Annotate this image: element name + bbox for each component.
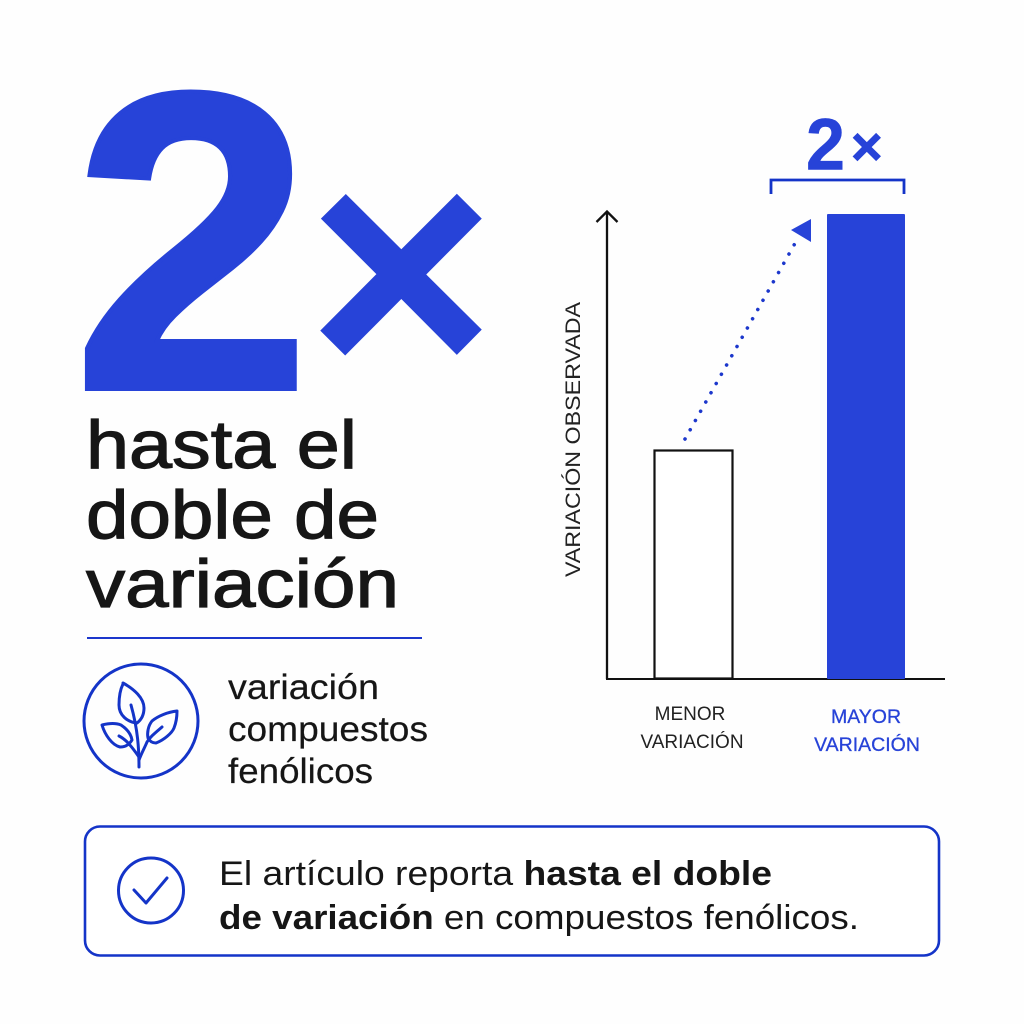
callout text xyxy=(219,855,859,937)
icon label: variación xyxy=(228,668,379,707)
callout box xyxy=(85,826,939,956)
big headline number 2x xyxy=(72,4,495,480)
callout text: de variación en compuestos fenólicos. xyxy=(219,899,859,937)
headline text: hasta el xyxy=(86,407,357,483)
headline text: doble de xyxy=(86,477,379,553)
headline text: variación xyxy=(86,546,399,622)
bar: mayor variacion xyxy=(827,214,905,679)
icon label xyxy=(228,668,428,791)
category label: menor xyxy=(640,704,744,753)
category label: mayor: MAYOR xyxy=(831,706,901,728)
divider xyxy=(87,637,422,639)
headline text xyxy=(86,407,399,622)
big headline number 2x: 2 xyxy=(72,4,312,480)
y axis with arrow xyxy=(596,212,618,679)
chart xyxy=(562,104,945,756)
category label: mayor: VARIACIÓN xyxy=(814,733,920,756)
x axis xyxy=(606,678,945,680)
dotted arrow xyxy=(685,219,811,439)
callout text: El artículo reporta hasta el doble xyxy=(219,855,772,893)
category label: menor: MENOR xyxy=(655,704,725,725)
icon label: fenólicos xyxy=(228,752,373,791)
category label: menor: VARIACIÓN xyxy=(640,731,744,753)
bar: menor variacion xyxy=(654,450,732,678)
y axis label: VARIACIÓN OBSERVADA xyxy=(562,302,585,577)
icon label: compuestos xyxy=(228,710,428,749)
icon: check circle xyxy=(118,858,184,923)
small 2x label: 2 xyxy=(806,104,845,186)
small 2x label xyxy=(806,104,883,186)
category label: mayor xyxy=(814,706,920,756)
bracket xyxy=(771,180,904,194)
small 2x label: × xyxy=(851,117,883,177)
icon: plant in circle xyxy=(84,664,198,778)
big headline number 2x: × xyxy=(307,91,495,451)
